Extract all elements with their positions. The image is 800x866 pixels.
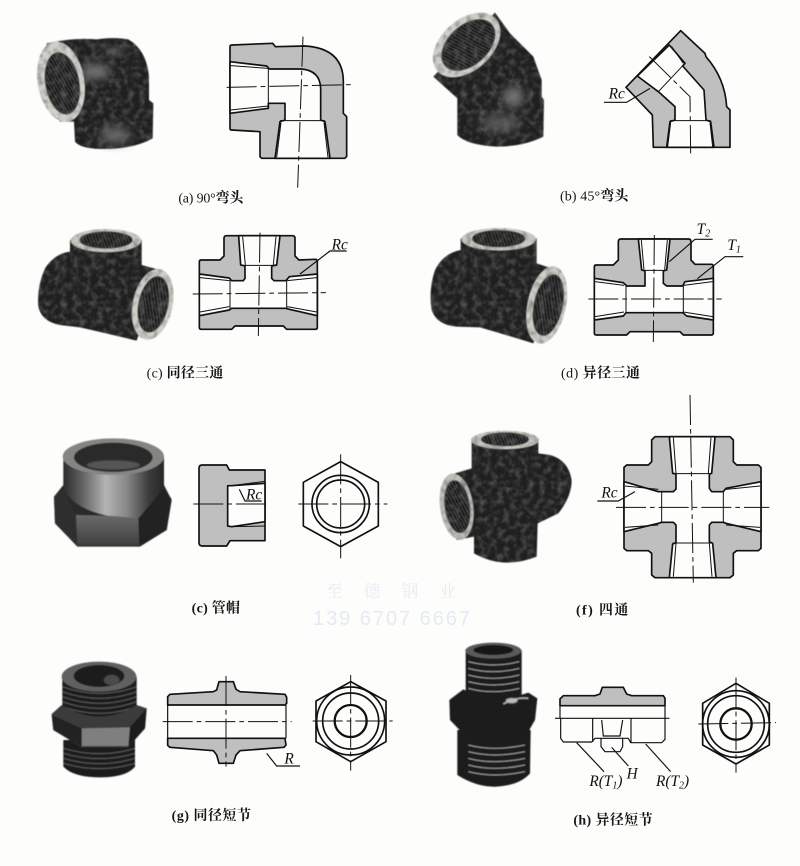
label: Rc: Rc <box>608 85 625 102</box>
watermark: 139 6707 6667 <box>313 608 470 630</box>
section drawing: 90 degree elbow <box>227 37 351 188</box>
caption (c): (c) 同径三通 <box>147 366 223 382</box>
caption (e): (c) 管帽 <box>192 600 240 617</box>
end view: equal nipple hexagon <box>313 675 393 771</box>
label: R(T1): 1 <box>612 781 617 792</box>
caption (b): (b) 45°弯头 <box>560 188 630 205</box>
photo: equal nipple <box>52 662 147 777</box>
label: Rc: Rc <box>245 486 262 503</box>
photo: hex pipe cap <box>54 438 172 547</box>
label: T1 <box>697 237 743 279</box>
panel: (g) equal nipple <box>52 662 393 824</box>
end view: pipe cap hexagon <box>298 454 387 558</box>
label: R: R <box>283 750 294 767</box>
panel: (a) 90 degree elbow <box>31 37 351 206</box>
panel: (b) 45 degree elbow <box>420 0 730 205</box>
panel: (d) reducing tee <box>431 221 743 382</box>
section drawing: pipe cap <box>193 465 268 546</box>
label: T2: 2 <box>705 229 710 240</box>
photo: reducing tee <box>431 228 574 347</box>
label: R(T2): R(T <box>656 773 679 790</box>
section drawing: reducing nipple <box>555 687 689 792</box>
section drawing: cross <box>597 395 769 583</box>
photo: 90 degree elbow <box>31 38 153 149</box>
label: T2 <box>669 221 713 262</box>
label: Rc: Rc <box>600 485 618 502</box>
label: H: H <box>626 765 639 782</box>
label: T1: 1 <box>736 245 741 256</box>
end view: reducing nipple hexagon <box>698 678 776 773</box>
caption (h): (h) 异径短节 <box>573 811 653 828</box>
label: R(T1): R(T <box>589 773 612 790</box>
label: R(T1) <box>577 743 622 792</box>
caption (d): (d) 异径三通 <box>561 366 640 382</box>
label: Rc: Rc <box>331 236 348 253</box>
label: Rc <box>597 485 635 502</box>
section drawing: equal nipple <box>163 676 300 767</box>
section drawing: reducing tee <box>588 221 743 342</box>
label: R(T2): 2 <box>679 781 684 792</box>
label: R(T2): ) <box>683 773 689 790</box>
label: Rc <box>300 236 348 274</box>
watermark: 至 德 钢 业 <box>326 582 456 601</box>
label: T2: T <box>697 221 705 238</box>
photo: cross fitting <box>436 431 572 563</box>
panel: (c) equal tee <box>38 229 348 382</box>
photo: reducing nipple <box>449 643 537 787</box>
label: R(T2) <box>646 744 689 792</box>
panel: (h) reducing nipple <box>449 643 776 828</box>
photo: 45 degree elbow <box>420 0 544 147</box>
panel: (e) pipe cap <box>54 438 387 617</box>
section drawing: 45 degree elbow <box>604 31 730 153</box>
caption (g): (g) 同径短节 <box>172 807 251 824</box>
photo: equal tee <box>38 229 180 344</box>
caption (a): (a) 90°弯头 <box>178 189 245 206</box>
label: T1: T <box>727 237 736 254</box>
section drawing: equal tee <box>193 233 348 336</box>
panel: (f) cross <box>436 395 769 618</box>
label: R(T1): ) <box>616 773 622 790</box>
caption (f): (f) 四通 <box>576 602 628 618</box>
watermark <box>313 582 470 630</box>
